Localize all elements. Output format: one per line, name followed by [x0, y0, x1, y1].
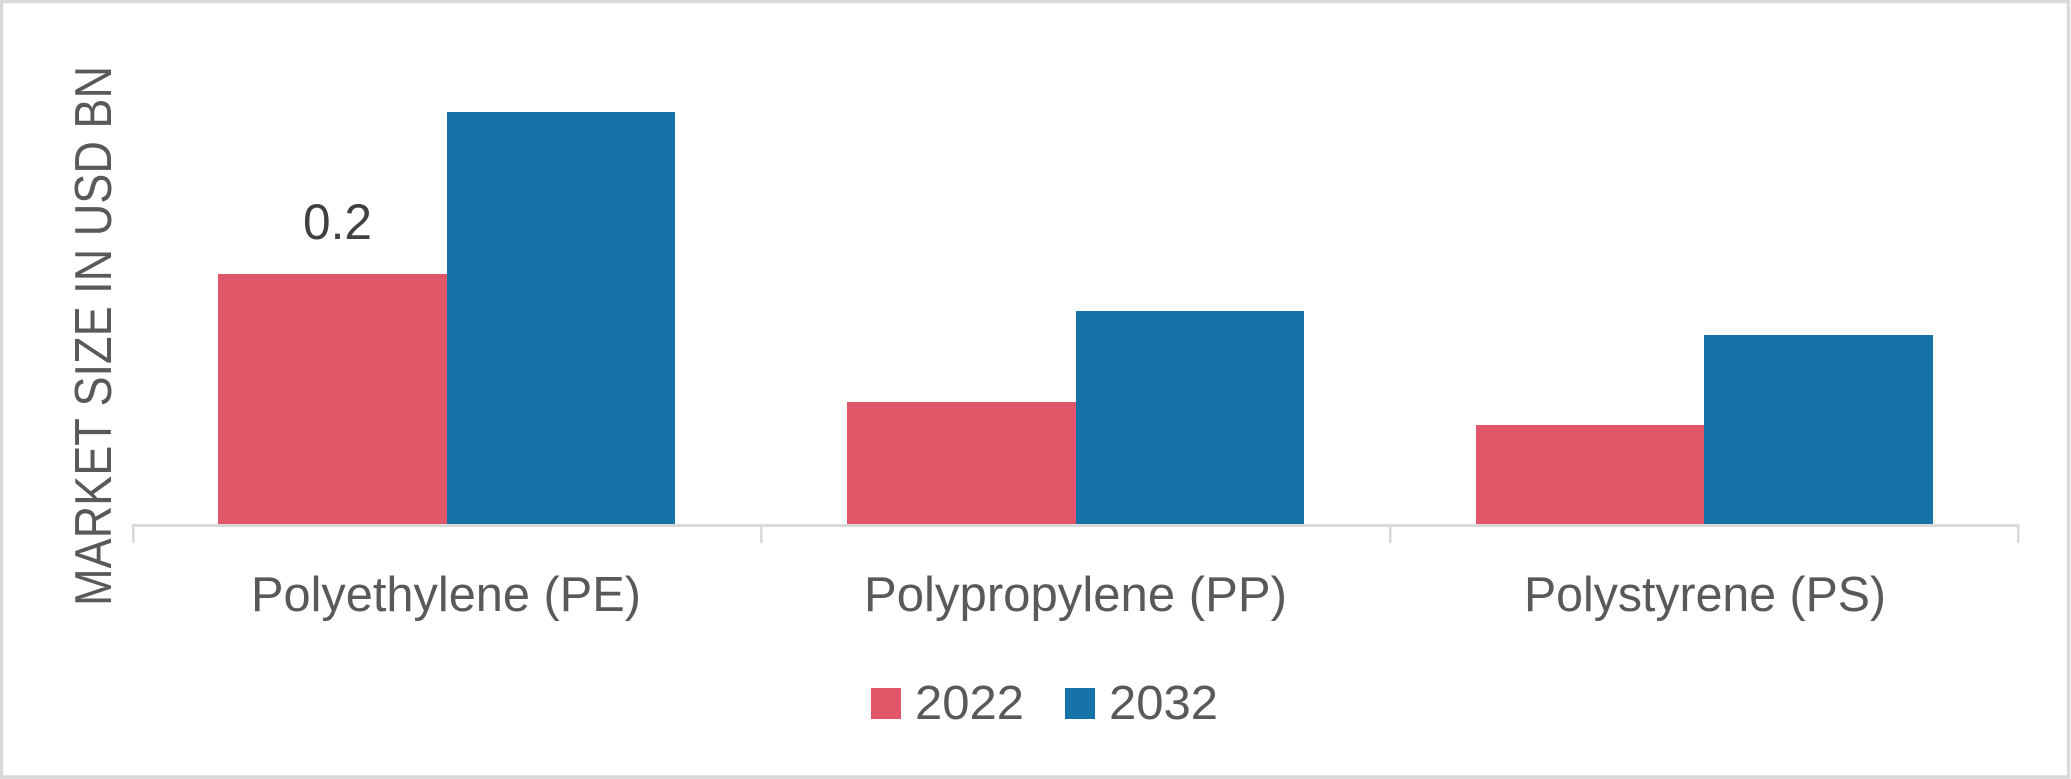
data label: 0.2: 0.2 — [303, 194, 372, 250]
bars: Polyethylene (PE) — [218, 112, 675, 524]
category label: Polystyrene (PS): Polystyrene (PS) — [1524, 567, 1886, 622]
category label: Polyethylene (PE): Polyethylene (PE) — [251, 567, 641, 622]
legend item: 2022: 2022 — [915, 677, 1024, 730]
legend — [871, 677, 1218, 730]
category axis — [132, 524, 2020, 543]
legend item: 2032 — [1065, 677, 1218, 730]
legend item: 2022 — [871, 677, 1024, 730]
bars: Polystyrene (PS) — [1476, 335, 1933, 524]
axis title: MARKET SIZE IN USD BN — [65, 66, 123, 606]
bars: Polypropylene (PP) — [847, 311, 1304, 524]
category label: Polypropylene (PP): Polypropylene (PP) — [864, 567, 1287, 622]
legend item: 2032: 2032 — [1109, 677, 1218, 730]
